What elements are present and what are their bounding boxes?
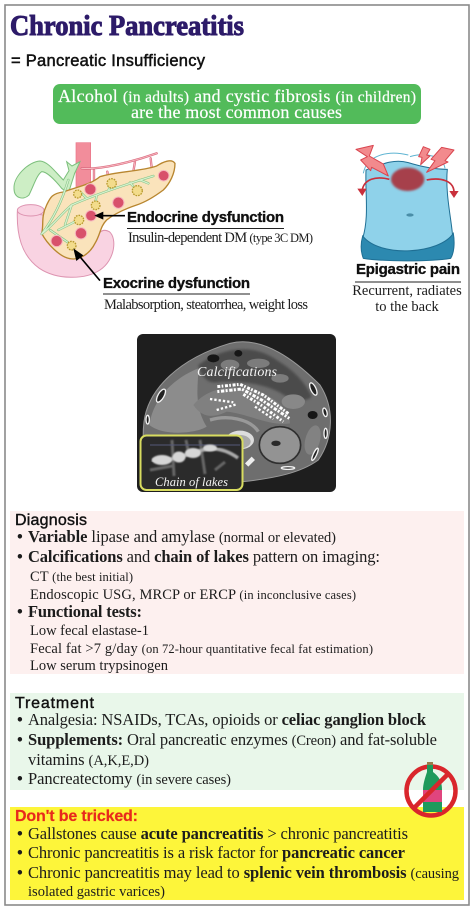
heading: treatment: Treatment — [15, 695, 95, 712]
panel: don't be tricked: isolated gastric varices) — [28, 884, 165, 900]
endocrine islets — [51, 170, 169, 247]
liver — [149, 368, 207, 433]
callout: common causes: Alcohol (in adults) and cystic fibrosis (in children) — [58, 86, 416, 106]
underwear band — [361, 233, 454, 261]
panel: diagnosis — [10, 511, 464, 674]
illustration: abdomen with epigastric pain — [356, 145, 459, 261]
callout: common causes — [53, 84, 421, 124]
title: Chronic Pancreatitis — [10, 11, 244, 42]
illustration: pancreas — [14, 143, 175, 281]
panel: treatment: • — [17, 769, 23, 788]
exocrine acini — [67, 179, 142, 250]
vertebra — [226, 431, 254, 449]
aorta — [76, 143, 91, 188]
chest outline — [363, 153, 445, 173]
lightning bolts — [356, 145, 454, 176]
body cross-section — [143, 342, 330, 483]
loop of bowel — [282, 394, 305, 409]
panel: diagnosis: CT (the best initial) — [30, 569, 133, 585]
panel: treatment: Pancreatectomy (in severe cases) — [28, 769, 231, 788]
panel: don't be tricked: • — [17, 843, 23, 862]
label: exocrine dysfunction: Exocrine dysfunction — [103, 275, 250, 292]
bowel gas — [207, 350, 318, 419]
panel: diagnosis: Low fecal elastase-1 — [30, 623, 149, 639]
label: epigastric pain: to the back — [375, 299, 440, 315]
panel: don't be tricked: Chronic pancreatitis may lead to splenic vein thrombosis (causing — [28, 863, 459, 882]
arrow: endocrine — [94, 212, 125, 220]
label: endocrine dysfunction: Endocrine dysfunction — [127, 209, 284, 226]
panel: don't be tricked: Chronic pancreatitis is a risk factor for pancreatic cancer — [28, 843, 405, 862]
icon: no alcohol — [406, 762, 456, 816]
duodenum opening — [17, 205, 44, 216]
panel: diagnosis: Fecal fat >7 g/day (on 72-hour quantitative fecal fat estimation) — [30, 641, 373, 657]
navel — [406, 213, 414, 217]
panel: diagnosis: Endoscopic USG, MRCP or ERCP (in inconclusive cases) — [30, 587, 356, 603]
label: exocrine dysfunction — [103, 275, 308, 313]
CT scan image — [137, 334, 336, 492]
pancreas body — [42, 161, 175, 259]
panel: diagnosis: Low serum trypsinogen — [30, 658, 169, 674]
ribs — [146, 382, 328, 469]
callout: common causes: are the most common causes — [131, 102, 342, 122]
gallbladder and bile duct — [14, 161, 80, 198]
bowel and fat — [198, 349, 312, 400]
panel: don't be tricked: Gallstones cause acute pancreatitis > chronic pancreatitis — [28, 824, 408, 843]
label: calcifications: Calcifications — [197, 365, 278, 380]
panel: treatment: Supplements: Oral pancreatic enzymes (Creon) and fat-soluble — [28, 730, 437, 749]
muscle wall — [302, 424, 324, 456]
panel: don't be tricked — [10, 807, 464, 900]
heading: diagnosis: Diagnosis — [15, 512, 87, 529]
pancreatic duct — [42, 176, 153, 245]
panel: don't be tricked: • — [17, 863, 23, 882]
left kidney — [259, 427, 301, 463]
panel: treatment: • — [17, 730, 23, 749]
pain area — [391, 168, 424, 191]
panel: diagnosis: • — [17, 602, 23, 621]
aorta and vessels — [210, 418, 258, 432]
panel: don't be tricked: • — [17, 824, 23, 843]
abdomen body — [363, 161, 453, 252]
radiating arrows — [362, 178, 454, 194]
panel: treatment: Analgesia: NSAIDs, TCAs, opioids or celiac ganglion block — [28, 710, 427, 729]
heading: don't be tricked: Don't be tricked: — [15, 808, 138, 825]
label: epigastric pain — [352, 261, 462, 315]
inset: chain of lakes: Chain of lakes — [155, 475, 228, 489]
label: endocrine dysfunction: Insulin-dependent DM (type 3C DM) — [128, 230, 313, 246]
panel: diagnosis: • — [17, 527, 23, 546]
panel: diagnosis: • — [17, 547, 23, 566]
duodenum — [17, 212, 114, 277]
panel: treatment: vitamins (A,K,E,D) — [28, 750, 149, 769]
panel: treatment: • — [17, 710, 23, 729]
panel: diagnosis: Functional tests: — [28, 602, 142, 621]
arrow: exocrine — [73, 248, 100, 281]
calcifications — [210, 384, 289, 422]
subtitle: = Pancreatic Insufficiency — [11, 52, 206, 70]
label: epigastric pain: Epigastric pain — [356, 261, 460, 278]
panel: diagnosis: Calcifications and chain of lakes pattern on imaging: — [28, 547, 380, 566]
label: endocrine dysfunction — [127, 209, 313, 246]
pancreas tissue — [193, 387, 290, 424]
splenic artery branches — [82, 153, 160, 182]
inset: chain of lakes — [140, 436, 242, 490]
bowel loops — [221, 359, 289, 383]
panel: diagnosis: Variable lipase and amylase (normal or elevated) — [28, 527, 336, 546]
label: epigastric pain: Recurrent, radiates — [352, 283, 462, 299]
panel: treatment — [10, 693, 464, 790]
label: exocrine dysfunction: Malabsorption, steatorrhea, weight loss — [104, 297, 308, 313]
